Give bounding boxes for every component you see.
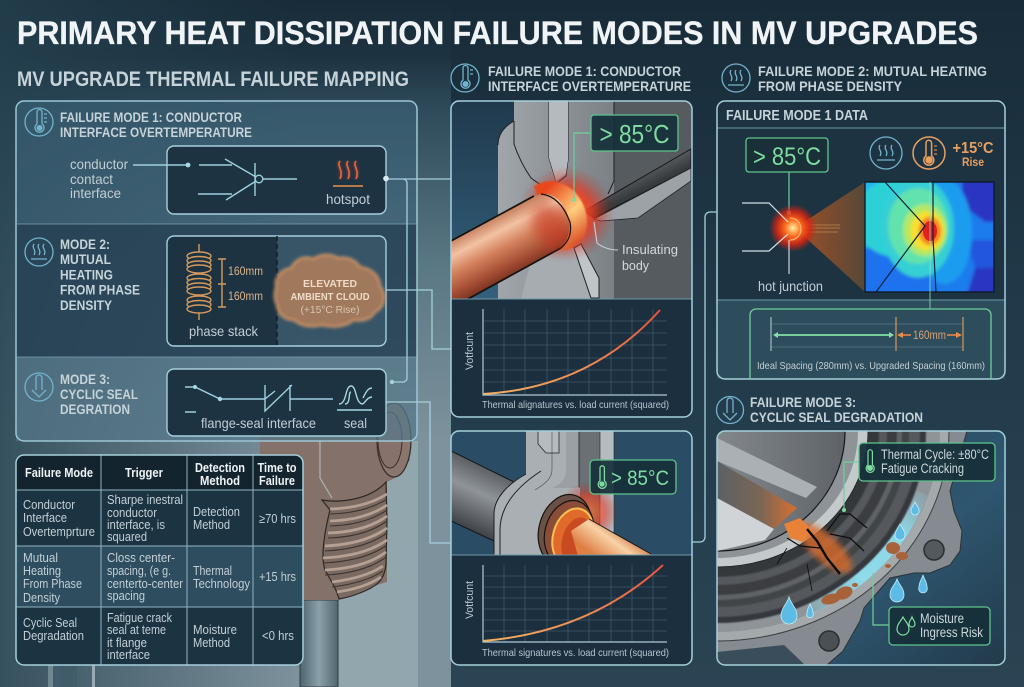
label: insulating body: body bbox=[622, 258, 649, 273]
rust bbox=[797, 519, 856, 576]
panel: failure mode data bbox=[717, 101, 1005, 379]
right heading: seal degradation: FAILURE MODE 3: bbox=[750, 394, 856, 410]
table row: mutual heating from phase density: centerto-center bbox=[107, 577, 183, 591]
table header: Time to bbox=[258, 461, 297, 475]
table row: conductor interface overtemperature: Sharpe inestral bbox=[107, 493, 183, 507]
table row: cyclic seal degradation: Fatigue crack bbox=[107, 611, 173, 625]
panel: cracked seal illustration bbox=[716, 430, 1006, 666]
mode 3 heading bbox=[60, 372, 138, 417]
icon: temperature rise bbox=[913, 137, 945, 169]
spacing comparison: 160mm bbox=[913, 330, 946, 342]
table row: conductor interface overtemperature: ≥70 hrs bbox=[259, 512, 296, 526]
table row: conductor interface overtemperature bbox=[23, 493, 296, 544]
conductor contact interface label bbox=[70, 156, 128, 201]
schematic box: hotspot: hotspot bbox=[326, 191, 370, 207]
elevated ambient cloud bbox=[275, 255, 384, 327]
cracks bbox=[777, 514, 867, 591]
table header: Detection bbox=[195, 461, 245, 475]
right heading: seal degradation: CYCLIC SEAL DEGRADATION bbox=[750, 409, 923, 425]
rise label: Rise bbox=[962, 157, 984, 169]
schematic box: phase stack and cloud: 160mm bbox=[228, 266, 263, 278]
table row: cyclic seal degradation: Cyclic Seal bbox=[23, 616, 77, 630]
table row: cyclic seal degradation: Degradation bbox=[23, 629, 84, 643]
mode 2 heading: DENSITY bbox=[60, 298, 112, 313]
mode 1 heading: INTERFACE OVERTEMPERATURE bbox=[60, 125, 252, 140]
table row: cyclic seal degradation: <0 hrs bbox=[262, 629, 294, 643]
schematic box: phase stack and cloud bbox=[167, 236, 386, 346]
table row: conductor interface overtemperature: Method bbox=[193, 518, 230, 532]
panel: thermal failure mapping bbox=[16, 101, 417, 441]
table row: mutual heating from phase density: Density bbox=[23, 591, 61, 605]
icon: heat waves bbox=[25, 238, 53, 266]
mode 1 heading: FAILURE MODE 1: CONDUCTOR bbox=[60, 110, 242, 125]
illustration: conductor joint bbox=[451, 101, 692, 299]
table header bbox=[25, 461, 297, 488]
icon: cycle arrow bbox=[716, 396, 744, 424]
icon: thermometer bbox=[451, 64, 479, 92]
icon: cycle arrow bbox=[25, 373, 53, 401]
panel: conductor interface detail bbox=[451, 101, 692, 417]
mode 1 heading bbox=[60, 110, 252, 140]
table row: mutual heating from phase density: spacing bbox=[107, 589, 145, 603]
center heading: conductor interface bbox=[451, 63, 691, 94]
elevated ambient cloud: (+15°C Rise) bbox=[300, 304, 360, 316]
callout: thermal cycle: Fatigue Cracking bbox=[881, 461, 964, 476]
illustration: flanged joint bbox=[452, 432, 692, 554]
schematic box: flange seal: flange-seal interface bbox=[201, 415, 316, 431]
chart: thermal signature curve bbox=[464, 309, 669, 411]
callout: thermal cycle: Thermal Cycle: ±80°C bbox=[881, 447, 989, 462]
label: insulating body bbox=[622, 244, 678, 272]
mode 3 row bbox=[25, 369, 386, 436]
callout: temperature: > 85°C bbox=[600, 119, 670, 149]
table header: Failure bbox=[259, 474, 295, 488]
spacing comparison bbox=[750, 182, 991, 379]
callout: temperature: > 85°C bbox=[611, 467, 669, 490]
table row: conductor interface overtemperature: conductor bbox=[107, 506, 157, 520]
icon: thermometer bbox=[25, 108, 53, 136]
panel: flange interface detail bbox=[451, 431, 692, 665]
mode 3 heading: MODE 3: bbox=[60, 372, 110, 387]
schematic box: hotspot bbox=[133, 146, 386, 214]
bushing illustration behind panels bbox=[260, 403, 411, 600]
callout: moisture bbox=[889, 607, 990, 645]
heading: thermal failure mapping: MV UPGRADE THERMAL FAILURE MAPPING bbox=[17, 68, 409, 91]
table row: conductor interface overtemperature: interface, is bbox=[107, 518, 165, 532]
mode 2 row bbox=[25, 236, 386, 346]
elevated ambient cloud: ELEVATED bbox=[303, 278, 357, 290]
panel heading: FAILURE MODE 1 DATA bbox=[726, 108, 868, 124]
hot junction diagram bbox=[742, 182, 865, 294]
table row: conductor interface overtemperature: Conductor bbox=[23, 498, 75, 512]
table row: mutual heating from phase density: spacing, (e g. bbox=[107, 564, 171, 578]
table header: Failure Mode bbox=[25, 466, 93, 480]
table row: mutual heating from phase density: From Phase bbox=[23, 577, 82, 591]
mode 2 heading: HEATING bbox=[60, 268, 113, 282]
table header: Trigger bbox=[125, 466, 163, 480]
table row: conductor interface overtemperature: Interface bbox=[23, 511, 67, 525]
table row: mutual heating from phase density bbox=[23, 551, 296, 605]
hot junction diagram: hot junction bbox=[758, 278, 823, 294]
mode 2 heading: MUTUAL bbox=[60, 252, 111, 267]
mode 3 heading: CYCLIC SEAL bbox=[60, 387, 138, 402]
spacing comparison: Ideal Spacing (280mm) vs. Upgraded Spacing (160mm) bbox=[757, 360, 985, 372]
table row: cyclic seal degradation: seal at teme bbox=[107, 623, 166, 637]
label: insulating body: Insulating bbox=[622, 242, 678, 257]
inner strut bbox=[717, 461, 797, 529]
mode 2 heading bbox=[60, 237, 140, 313]
icon: seal bbox=[337, 386, 372, 410]
table row: conductor interface overtemperature: Overtemprture bbox=[23, 525, 95, 539]
right heading: mutual heating bbox=[722, 63, 987, 94]
table: failure mode summary bbox=[16, 455, 303, 665]
chart: thermal signature curve: Thermal signatures vs. load current (squared) bbox=[482, 647, 669, 659]
seal rings bbox=[718, 432, 950, 642]
table row: conductor interface overtemperature: Detection bbox=[193, 505, 240, 519]
conductor contact interface label: interface bbox=[70, 185, 121, 201]
right heading: seal degradation bbox=[716, 394, 923, 425]
table row: cyclic seal degradation: interface bbox=[107, 648, 150, 662]
flange bbox=[717, 431, 967, 665]
mode 1 row bbox=[25, 108, 386, 214]
callout: thermal cycle bbox=[859, 443, 995, 481]
right heading: mutual heating: FROM PHASE DENSITY bbox=[758, 78, 903, 94]
callout: moisture: Ingress Risk bbox=[920, 625, 983, 640]
table row: cyclic seal degradation bbox=[23, 611, 294, 662]
callout: temperature bbox=[590, 460, 676, 494]
chart: thermal signature curve: Votfcunt bbox=[464, 581, 476, 619]
water drops bbox=[781, 502, 927, 624]
bolt holes bbox=[819, 540, 944, 651]
elevated ambient cloud: AMBIENT CLOUD bbox=[290, 291, 370, 303]
leader lines bbox=[844, 462, 889, 625]
heatmap bbox=[864, 181, 995, 293]
icon: heat waves bbox=[870, 137, 902, 169]
icon: heat waves bbox=[722, 64, 750, 92]
table row: mutual heating from phase density: +15 hrs bbox=[259, 570, 296, 584]
chart: thermal signature curve bbox=[464, 565, 669, 659]
callout: temperature bbox=[746, 138, 828, 215]
table row: mutual heating from phase density: Closs center- bbox=[107, 551, 175, 565]
table header: Method bbox=[200, 474, 240, 488]
chart: thermal signature curve: Votfcunt bbox=[464, 332, 476, 370]
schematic box: flange seal: seal bbox=[344, 415, 367, 431]
table row: mutual heating from phase density: Mutual bbox=[23, 551, 58, 565]
table row: cyclic seal degradation: Method bbox=[193, 636, 230, 650]
callout: moisture: Moisture bbox=[920, 611, 964, 626]
table row: cyclic seal degradation: Moisture bbox=[193, 623, 237, 637]
callout: temperature: > 85°C bbox=[753, 143, 821, 171]
table row: cyclic seal degradation: it flange bbox=[107, 636, 147, 650]
center heading: conductor interface: FAILURE MODE 1: CONDUCTOR bbox=[488, 63, 681, 79]
rise label: +15°C bbox=[952, 140, 994, 157]
mode 2 heading: MODE 2: bbox=[60, 237, 110, 252]
chart: thermal signature curve: Thermal alignatures vs. load current (squared) bbox=[482, 399, 669, 411]
icon: hotspot bbox=[339, 161, 357, 179]
phase stack bbox=[187, 244, 226, 320]
schematic box: flange seal bbox=[167, 369, 386, 436]
table row: mutual heating from phase density: Heating bbox=[23, 564, 61, 578]
table row: conductor interface overtemperature: squared bbox=[107, 530, 147, 544]
schematic box: phase stack and cloud: phase stack bbox=[189, 323, 259, 339]
bushing pole bbox=[300, 600, 338, 687]
schematic box: phase stack and cloud: 160mm bbox=[228, 291, 263, 303]
mode 3 heading: DEGRATION bbox=[60, 402, 130, 417]
title: PRIMARY HEAT DISSIPATION FAILURE MODES IN MV UPGRADES bbox=[17, 15, 978, 51]
conductor contact interface label: conductor bbox=[70, 156, 128, 172]
rise label bbox=[952, 140, 994, 169]
center heading: conductor interface: INTERFACE OVERTEMPERATURE bbox=[488, 78, 691, 94]
corrosion bbox=[820, 542, 908, 606]
connector lines bbox=[383, 176, 717, 543]
table row: mutual heating from phase density: Technology bbox=[193, 577, 251, 591]
conductor contact interface label: contact bbox=[70, 171, 113, 187]
right heading: mutual heating: FAILURE MODE 2: MUTUAL HEATING bbox=[758, 63, 987, 79]
table row: mutual heating from phase density: Thermal bbox=[193, 564, 232, 578]
mode 2 heading: FROM PHASE bbox=[60, 282, 140, 298]
